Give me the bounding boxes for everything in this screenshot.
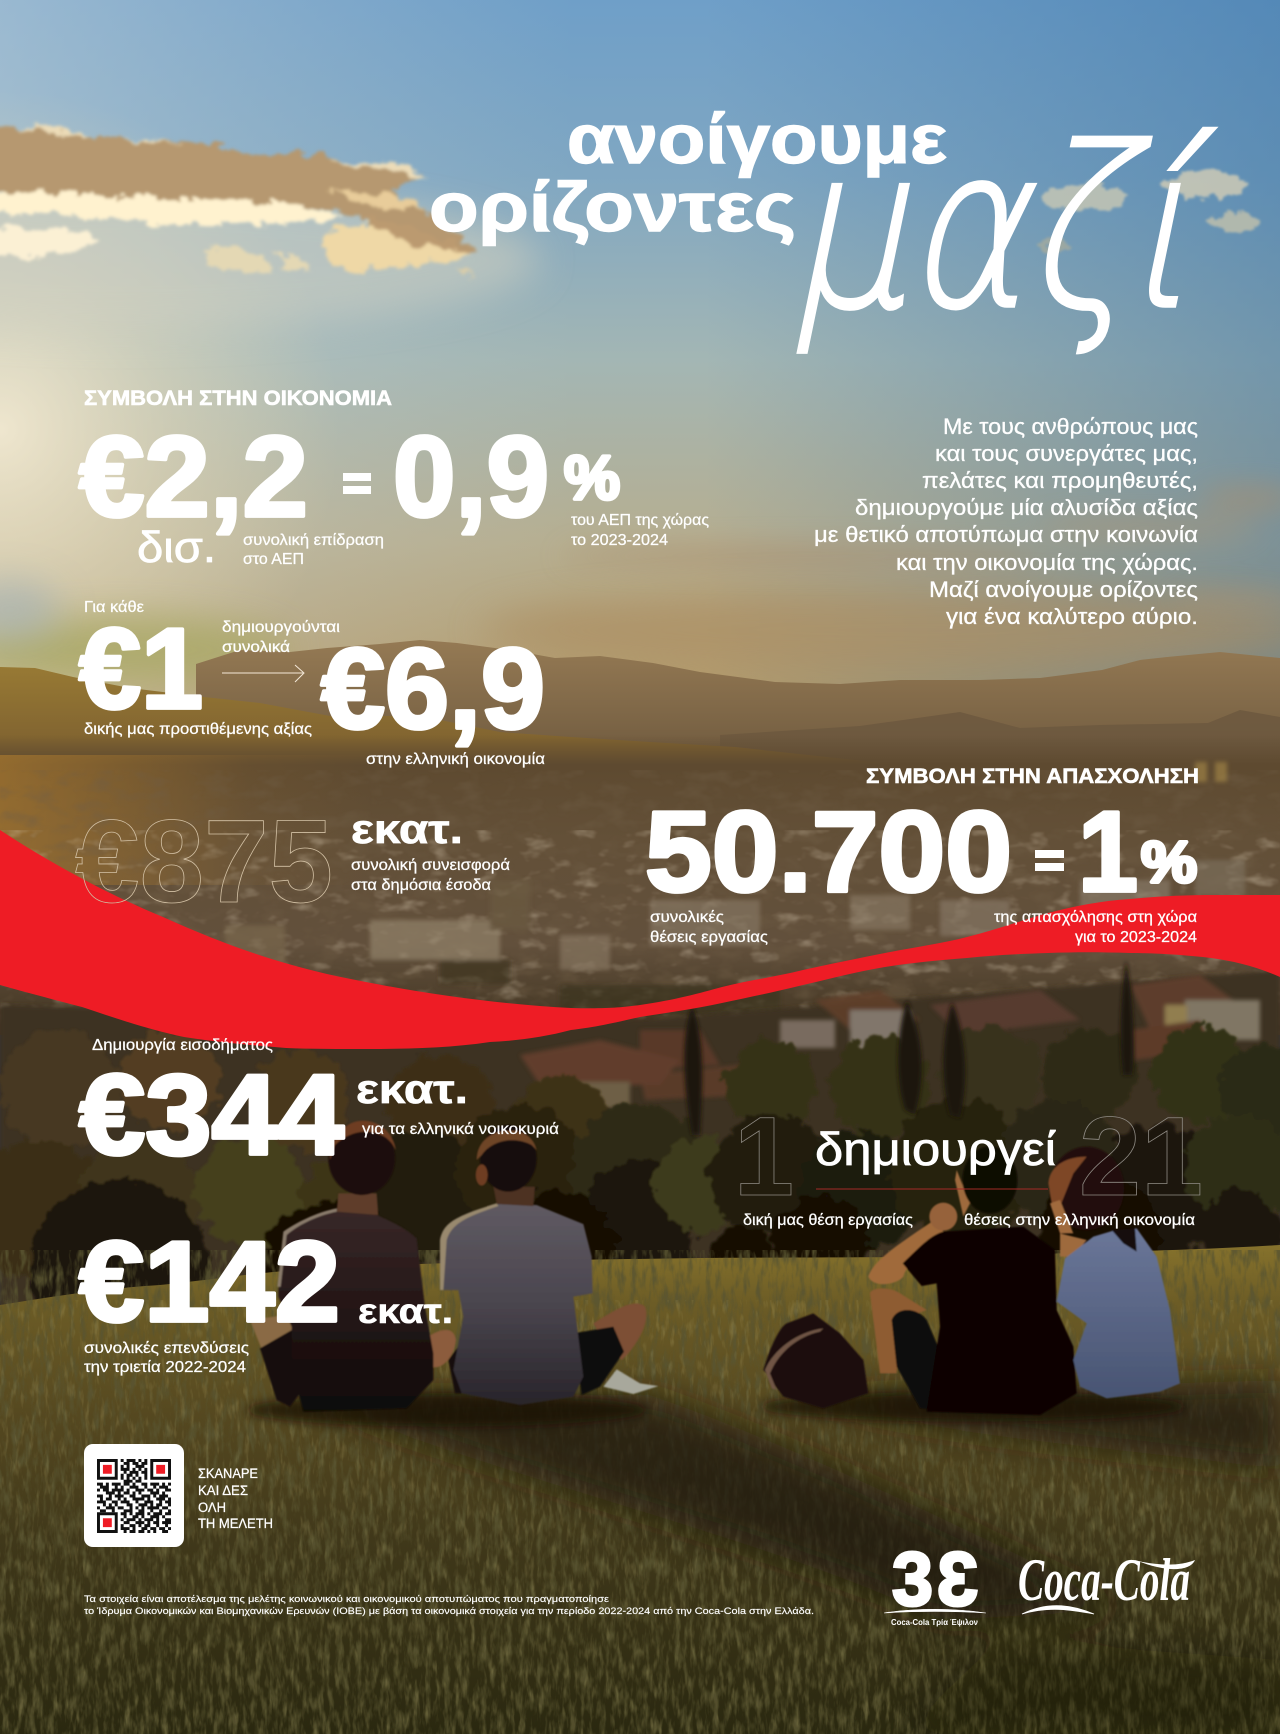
text block: intro paragraph: Μαζί ανοίγουμε ορίζοντες (929, 577, 1198, 602)
text block: intro paragraph: και την οικονομία της χώρας. (896, 550, 1198, 575)
text block: footnote: Τα στοιχεία είναι αποτέλεσμα της μελέτης κοινωνικού και οικονομικού αποτυπώματος που πραγματοποίησε (84, 1594, 610, 1605)
outlined number: 21: 21 (1079, 1094, 1203, 1219)
big number: €1: €1 (79, 606, 203, 733)
heading: ΣΥΜΒΟΛΗ ΣΤΗΝ ΑΠΑΣΧΟΛΗΣΗ (866, 765, 1199, 788)
caption: στα δημόσια έσοδα (351, 877, 491, 894)
text block: intro paragraph: πελάτες και προμηθευτές, (922, 468, 1198, 493)
caption: share of employment: για το 2023-2024 (1075, 929, 1197, 946)
arrow (222, 665, 304, 682)
logo: Coca-Cola Tria Epsilon: 3 (937, 1537, 978, 1622)
red rule (816, 1188, 1048, 1190)
percent sign: % (564, 444, 620, 513)
logo: Coca-Cola Tria Epsilon: 3 (892, 1537, 933, 1622)
caption: created in total: δημιουργούνται (222, 619, 340, 636)
caption: share of GDP (571, 512, 709, 549)
caption: share of GDP: του ΑΕΠ της χώρας (571, 512, 709, 529)
caption: GDP impact (243, 532, 384, 568)
title (429, 100, 1215, 359)
panel: contribution to the economy (79, 387, 709, 572)
icon: backpack (763, 1313, 868, 1408)
title line: ορίζοντες: ορίζοντες (429, 168, 796, 246)
text block: intro paragraph: και τους συνεργάτες μας, (935, 441, 1198, 466)
logo: Coca-Cola Tria Epsilon: Coca-Cola Τρία Έψιλον (891, 1617, 978, 1627)
caption (351, 857, 510, 894)
text block: scan call to action: ΤΗ ΜΕΛΕΤΗ (198, 1516, 273, 1531)
panel: investments (79, 1219, 453, 1376)
caption: συνολική συνεισφορά (351, 857, 510, 874)
text block: intro paragraph: δημιουργούμε μία αλυσίδα αξίας (855, 495, 1198, 520)
big number: €6,9: €6,9 (321, 626, 545, 753)
text block: footnote (84, 1594, 814, 1617)
text block: intro paragraph: για ένα καλύτερο αύριο. (946, 604, 1198, 629)
big number: 0,9: 0,9 (393, 414, 549, 541)
caption: created in total (222, 619, 340, 656)
houses and trees (0, 960, 1280, 1360)
grass field (0, 1245, 1280, 1734)
unit: εκατ.: εκατ. (358, 1292, 453, 1331)
caption: jobs in the economy: θέσεις στην ελληνική οικονομία (964, 1212, 1195, 1229)
text block: scan call to action: ΚΑΙ ΔΕΣ (198, 1483, 248, 1498)
two friends sitting on the left (247, 1121, 658, 1427)
big number: €2,2: €2,2 (79, 414, 308, 541)
clouds (0, 125, 1280, 608)
caption: share of GDP: το 2023-2024 (571, 532, 668, 549)
unit: δισ.: δισ. (137, 523, 216, 572)
title word: μαζί: μαζί (788, 101, 1215, 359)
two friends and backpack on the right (760, 1147, 1187, 1422)
sky (0, 0, 1280, 800)
caption: Greek economy: στην ελληνική οικονομία (366, 751, 545, 768)
big number: €142: €142 (79, 1219, 340, 1346)
caption: GDP impact: συνολική επίδραση (243, 532, 384, 549)
caption: total jobs: συνολικές (650, 909, 724, 926)
equals sign (1035, 850, 1064, 871)
text block: footnote: το Ίδρυμα Οικονομικών και Βιομηχανικών Ερευνών (ΙΟΒΕ) με βάση τα οικονομικά στοιχεία για την περίοδο 2022-2024 από την Coca-Cola στην Ελλάδα. (84, 1606, 814, 1617)
word: δημιουργεί: δημιουργεί (815, 1123, 1056, 1175)
logo: Coca-Cola: Coca-Cola (1018, 1547, 1190, 1613)
caption: GDP impact: στο ΑΕΠ (243, 551, 304, 568)
panel: contribution to employment (645, 765, 1199, 946)
panel: income creation (79, 1037, 559, 1179)
caption: total jobs (650, 909, 768, 946)
caption: own value added: δικής μας προστιθέμενης αξίας (84, 721, 312, 738)
QR code card (84, 1444, 184, 1547)
red ribbon wave (0, 830, 1280, 1049)
caption: total jobs: θέσεις εργασίας (650, 929, 768, 946)
panel: value multiplier (79, 599, 545, 768)
text block: scan call to action (198, 1466, 273, 1531)
unit: εκατ.: εκατ. (351, 806, 463, 852)
caption: την τριετία 2022-2024 (84, 1359, 246, 1376)
big number: €344: €344 (79, 1052, 344, 1179)
label: Για κάθε: Για κάθε (84, 599, 144, 616)
caption: share of employment (994, 909, 1197, 946)
heading: ΣΥΜΒΟΛΗ ΣΤΗΝ ΟΙΚΟΝΟΜΙΑ (84, 387, 392, 410)
caption: our job: δική μας θέση εργασίας (743, 1212, 913, 1229)
logo: Coca-Cola (1018, 1547, 1195, 1614)
caption (84, 1340, 249, 1376)
text block: scan call to action: ΟΛΗ (198, 1500, 226, 1515)
caption: συνολικές επενδύσεις (84, 1340, 249, 1357)
logo: Coca-Cola Tria Epsilon (884, 1537, 986, 1627)
city (0, 735, 1280, 1035)
text block: intro paragraph: με θετικό αποτύπωμα στην κοινωνία (814, 522, 1198, 547)
big number: 1: 1 (1078, 789, 1138, 916)
caption: share of employment: της απασχόλησης στη χώρα (994, 909, 1197, 926)
text block: scan call to action: ΣΚΑΝΑΡΕ (198, 1466, 258, 1481)
long shadows on the grass (300, 1380, 1280, 1734)
big number: 50.700: 50.700 (645, 789, 1012, 916)
caption: για τα ελληνικά νοικοκυριά (362, 1121, 559, 1138)
panel: public revenue contribution (75, 796, 510, 928)
panel: job multiplier (734, 1094, 1203, 1229)
outlined number: 1: 1 (734, 1094, 794, 1219)
percent sign: % (1141, 830, 1197, 895)
text block: intro paragraph: Με τους ανθρώπους μας (943, 414, 1198, 439)
outlined number: €875: €875 (75, 796, 333, 928)
label: Δημιουργία εισοδήματος (92, 1037, 273, 1054)
mountains (0, 640, 1280, 840)
title line: ανοίγουμε: ανοίγουμε (567, 100, 947, 178)
text block: intro paragraph (814, 414, 1198, 629)
caption: created in total: συνολικά (222, 639, 290, 656)
equals sign (343, 473, 371, 494)
unit: εκατ.: εκατ. (356, 1066, 468, 1112)
